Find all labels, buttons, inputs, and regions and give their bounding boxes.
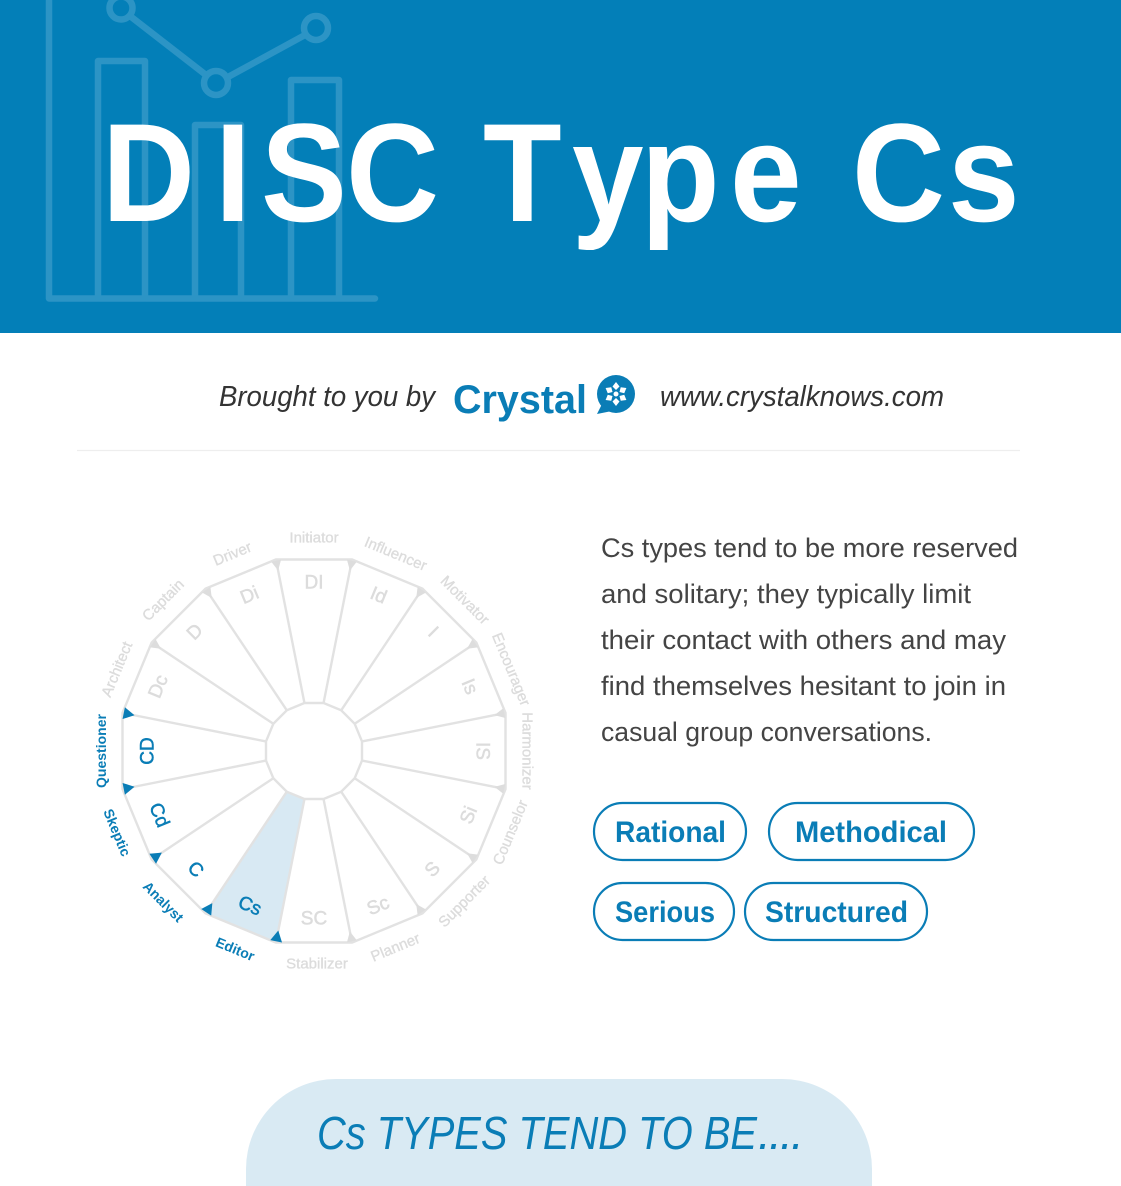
tag: Rational: Rational bbox=[615, 816, 726, 849]
tag: Structured bbox=[745, 883, 927, 940]
section heading tab bbox=[246, 1079, 872, 1186]
segment type labels: IS bbox=[472, 742, 492, 760]
outer role labels: Planner bbox=[368, 930, 423, 966]
tag: Serious bbox=[594, 883, 734, 940]
outer role labels: Architect bbox=[98, 639, 137, 700]
segment type labels: Id bbox=[367, 583, 390, 609]
segment type labels: Sc bbox=[364, 892, 393, 920]
description paragraph: Cs types tend to be more reserved bbox=[601, 533, 1018, 563]
blue vertex markers bbox=[123, 707, 284, 942]
segment type labels: S bbox=[421, 858, 445, 882]
title: DISC Type Cs bbox=[102, 94, 1020, 251]
highlighted wedge: Cs bbox=[206, 792, 304, 942]
tag: Methodical: Methodical bbox=[795, 816, 947, 849]
brought to you by: Brought to you by bbox=[219, 381, 436, 413]
tag: Serious: Serious bbox=[615, 896, 715, 929]
attribution row bbox=[219, 375, 944, 422]
crystal wordmark: Crystal bbox=[453, 378, 587, 422]
description paragraph: their contact with others and may bbox=[601, 625, 1007, 655]
outer role labels: Captain bbox=[139, 576, 188, 625]
segment type labels: Di bbox=[237, 583, 262, 609]
outer role labels: Encourager bbox=[488, 630, 533, 709]
tag: Rational bbox=[594, 803, 746, 860]
tag: Structured: Structured bbox=[765, 896, 908, 929]
icon: background bar and line chart bbox=[49, 0, 375, 298]
outer role labels: Driver bbox=[211, 539, 254, 570]
segment type labels: D bbox=[183, 620, 207, 644]
segment type labels: Is bbox=[457, 676, 482, 698]
trait tags bbox=[594, 803, 974, 940]
grey vertex markers bbox=[150, 560, 505, 942]
description paragraph: find themselves hesitant to join in bbox=[601, 671, 1006, 701]
outer role labels: Editor bbox=[214, 934, 258, 964]
DISC wheel chart bbox=[93, 530, 536, 972]
segment type labels: SC bbox=[301, 908, 327, 930]
icon: crystal speech bubble bbox=[597, 375, 635, 414]
segment type labels: Cd bbox=[144, 800, 173, 831]
segment type labels: DI bbox=[304, 572, 324, 594]
section heading text: Cs TYPES TEND TO BE bbox=[317, 1107, 758, 1159]
outer role labels: Initiator bbox=[289, 530, 339, 546]
outer role labels: Stabilizer bbox=[286, 956, 348, 972]
section heading text: .... bbox=[758, 1107, 804, 1159]
segment type labels: Si bbox=[456, 803, 482, 827]
segment type labels bbox=[138, 572, 493, 930]
outer role labels: Motivator bbox=[437, 573, 492, 628]
outer role labels bbox=[93, 530, 536, 972]
description paragraph: casual group conversations. bbox=[601, 717, 932, 747]
outer role labels: Counselor bbox=[490, 798, 532, 867]
description paragraph bbox=[601, 533, 1018, 747]
outer role labels: Influencer bbox=[362, 534, 429, 575]
segment type labels: I bbox=[424, 623, 442, 641]
outer role labels: Skeptic bbox=[100, 806, 134, 859]
outer role labels: Supporter bbox=[435, 872, 494, 931]
segment type labels: Cs bbox=[235, 892, 264, 920]
segment type labels: CD bbox=[138, 737, 158, 765]
tag: Methodical bbox=[769, 803, 974, 860]
website url: www.crystalknows.com bbox=[660, 381, 944, 413]
outer role labels: Analyst bbox=[140, 878, 187, 925]
wheel outline and spokes bbox=[122, 560, 506, 942]
segment type labels: C bbox=[183, 858, 207, 882]
segment type labels: Dc bbox=[145, 672, 173, 701]
hero banner bbox=[0, 0, 1121, 333]
description paragraph: and solitary; they typically limit bbox=[601, 579, 971, 609]
outer role labels: Questioner bbox=[93, 713, 109, 788]
outer role labels: Harmonizer bbox=[518, 712, 536, 790]
